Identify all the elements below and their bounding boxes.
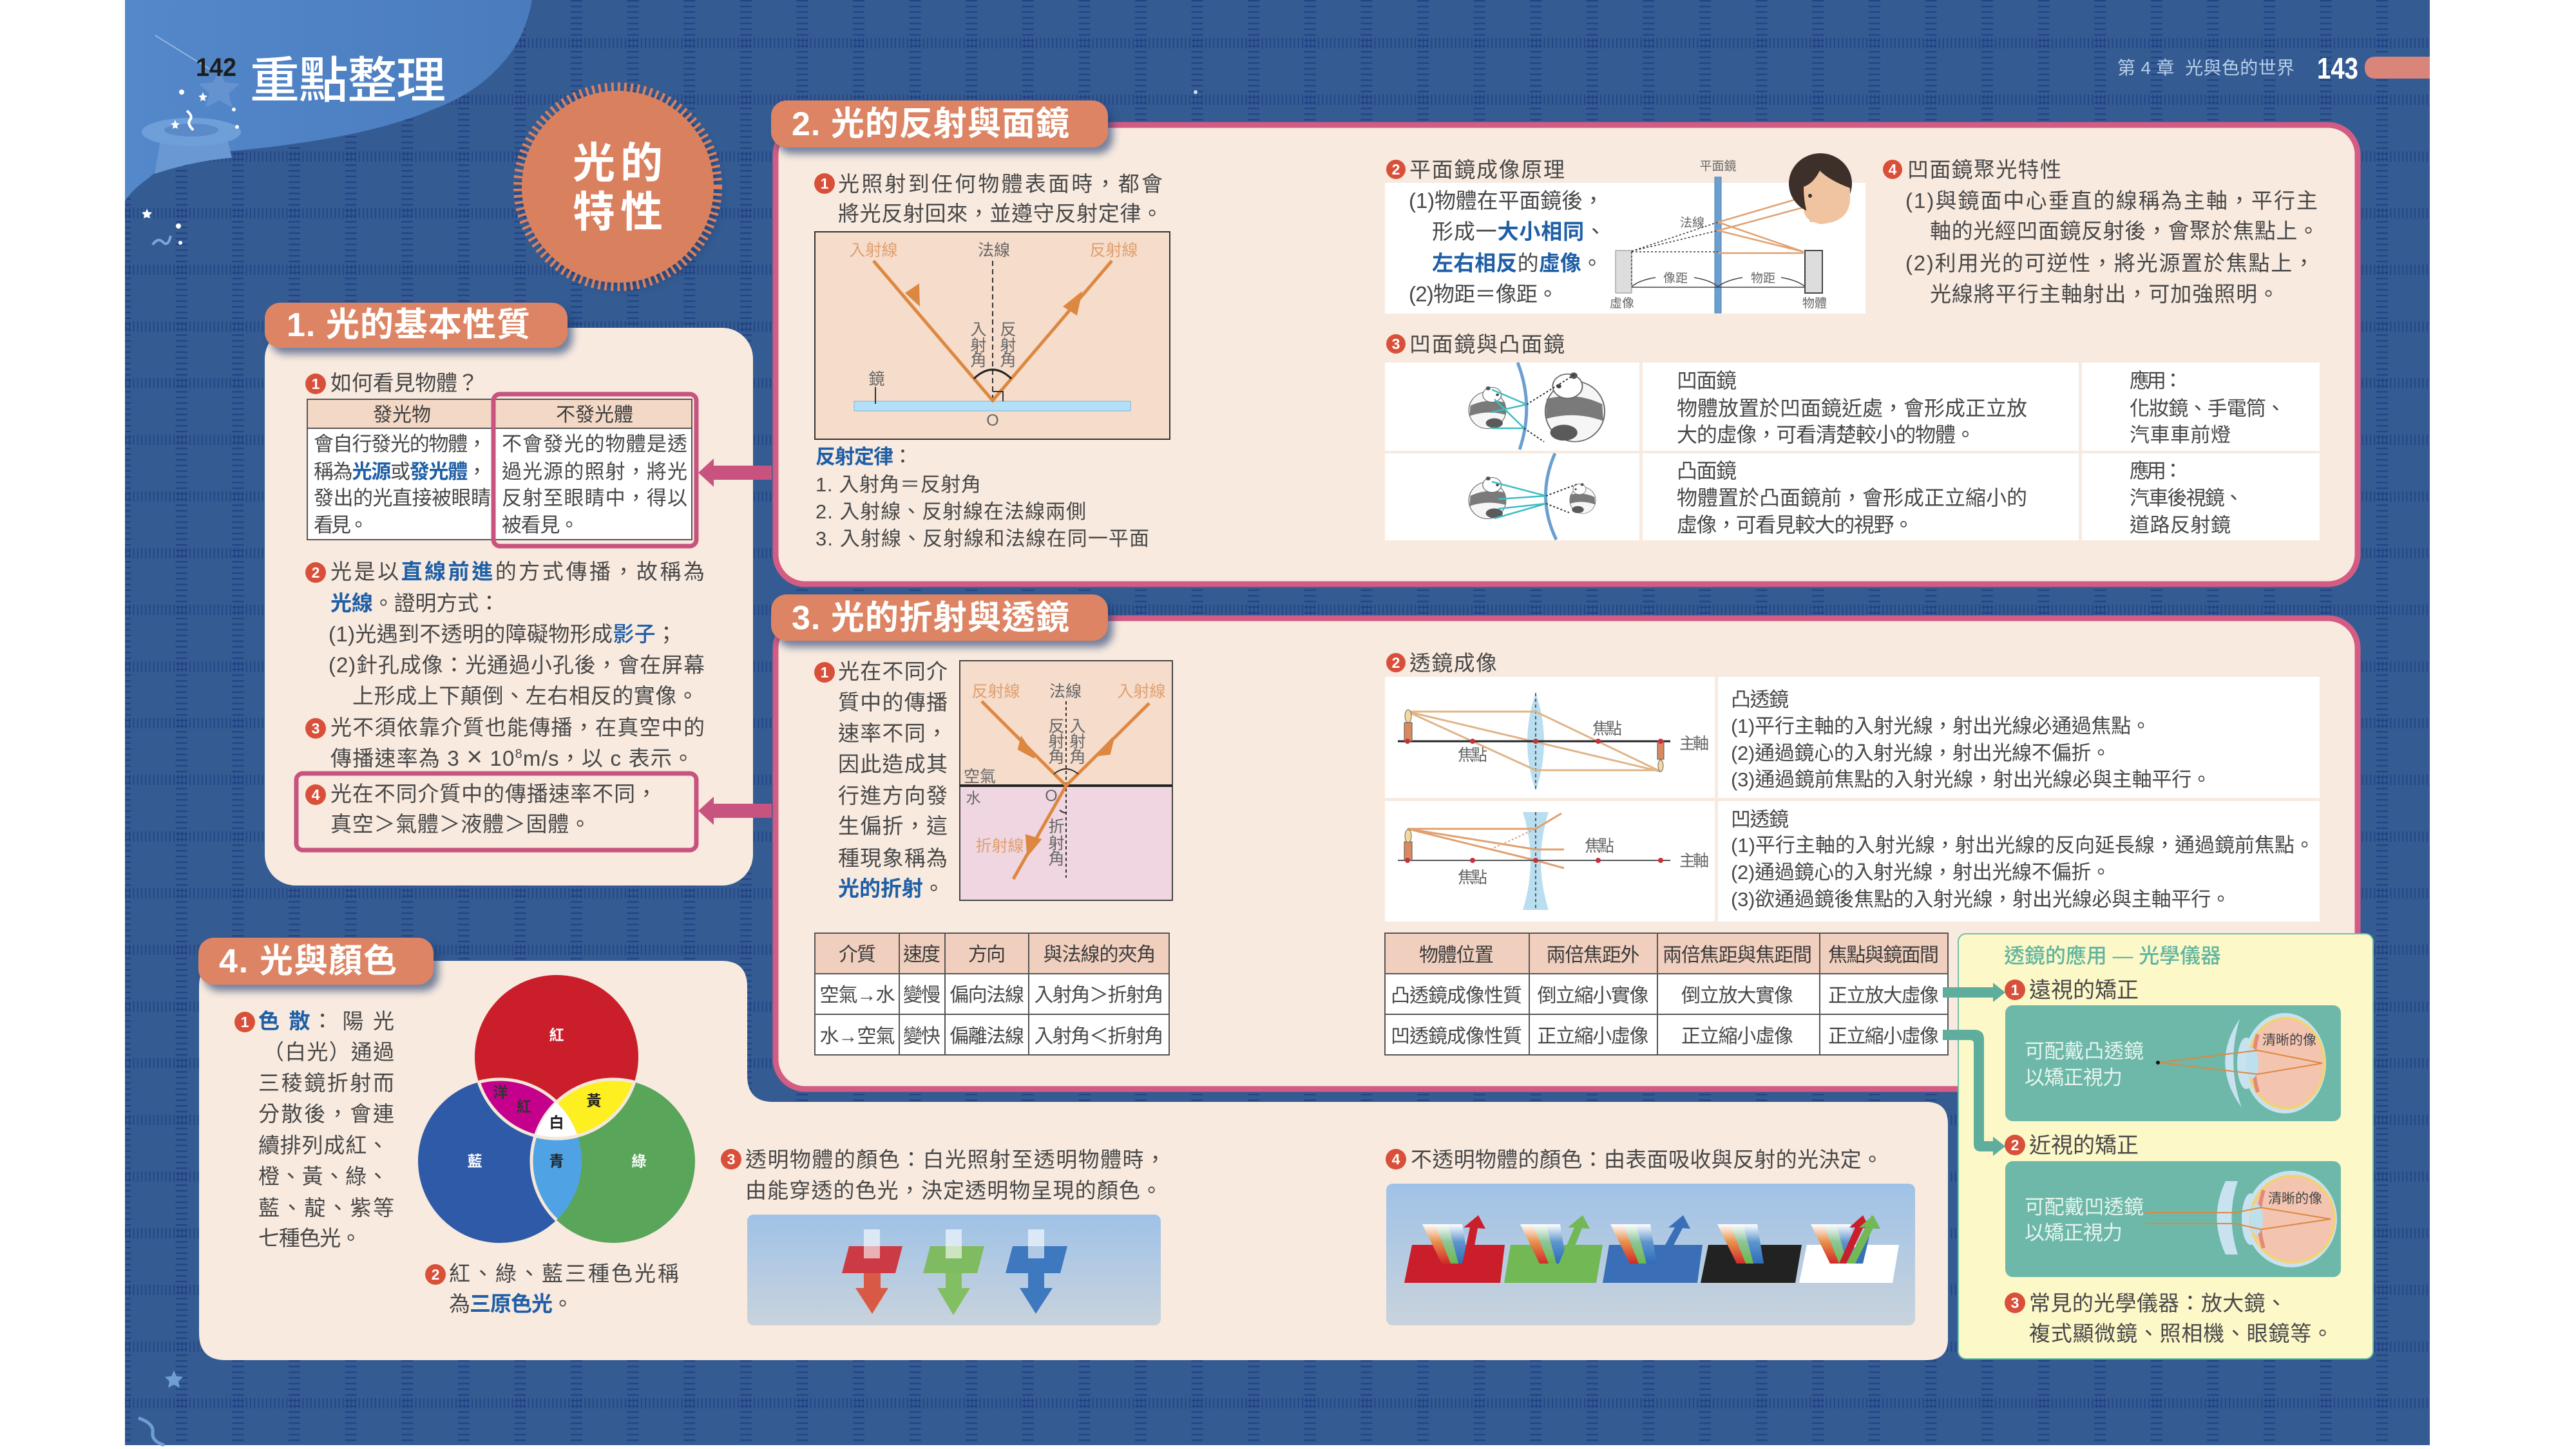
concave lens diagram: 主軸 [1679,852,1709,870]
heading 1 [265,303,573,354]
color mixing venn diagram: 綠 [631,1153,647,1170]
refraction diagram: 反 [1048,717,1065,735]
item 4 opaque object text: 4 [1392,1151,1400,1168]
item 3 instruments text: 常見的光學儀器：放大鏡、 [2029,1291,2287,1315]
page number 142: 142 [196,53,236,82]
item 2 primary colors text: 2 [432,1266,439,1283]
table: media comparison: 偏向法線 [949,985,1024,1006]
refraction diagram: 角 [1069,748,1086,766]
item 2 primary colors text: 紅、綠、藍三種色光稱 [449,1262,679,1285]
nearsightedness diagram: 以矯正視力 [2025,1222,2123,1244]
panel 1: basic properties of light [265,303,753,886]
item 1 refraction text: 1 [821,664,829,681]
table: luminous vs non-luminous: 發光物 [373,404,431,426]
item 3 transparent object text: 由能穿透的色光，決定透明物呈現的顏色。 [745,1179,1162,1202]
item 2 text: 2 [312,564,320,581]
item 3 text [305,715,705,772]
panel: mirror rows background [1385,363,2320,540]
refraction diagram: 折射線 [975,837,1024,855]
text: mirror applications [2130,370,2285,536]
farsightedness heading: 遠視的矯正 [2029,978,2139,1003]
refraction diagram [960,661,1172,900]
law of reflection text: 反射定律： [816,446,913,468]
item 1 refraction text [814,659,948,900]
text: convex and concave lens rules: (1)平行主軸的入射光線，射出光線必通過焦點。 [1731,715,2151,737]
item 1 reflection text [814,172,1163,225]
nearsightedness diagram: 清晰的像 [2268,1191,2322,1206]
heading 3: 3. 光的折射與透鏡 [792,600,1069,637]
text: concave and convex mirrors: 虛像，可看見較大的視野。 [1677,513,1914,536]
heading 2: 2. 光的反射與面鏡 [792,106,1069,143]
item 1 refraction text: 光在不同介 [838,659,948,683]
plane mirror text: (1)物體在平面鏡後， [1409,189,1604,213]
plane mirror diagram: 像距 [1663,271,1688,285]
badge: 光的特性: 光的 [573,139,668,187]
table: lens image properties: 凸透鏡成像性質 [1391,985,1522,1007]
text: convex and concave lens rules: (3)欲通過鏡後焦點的入射光線，射出光線必與主軸平行。 [1731,888,2231,911]
title: 重點整理 [250,53,446,109]
item 1 reflection text: 1 [821,175,829,192]
item 4 text: 4 [312,786,320,803]
item 1 refraction text: 光的折射。 [838,876,944,900]
refraction diagram: 射 [1048,733,1065,751]
item 4 concave mirror text: 光線將平行主軸射出，可加強照明。 [1930,282,2279,306]
text: concave and convex mirrors [1677,369,2027,536]
text: mirror applications: 應用： [2130,370,2183,392]
refraction diagram: 空氣 [964,768,996,786]
reflection diagram: 入射線 [849,242,898,260]
item 2 text: 光線。證明方式： [330,591,500,615]
convex mirror pandas [1469,453,1596,540]
table: lens image properties: 倒立縮小實像 [1537,985,1649,1007]
text: convex and concave lens rules: (1)平行主軸的入射光線，射出光線的反向延長線，通過鏡前焦點。 [1731,834,2314,857]
table: media comparison: 與法線的夾角 [1044,944,1156,965]
item 3 transparent object text: 3 [727,1151,735,1168]
color mixing venn diagram [418,975,695,1243]
table: luminous vs non-luminous: 會自行發光的物體， [314,433,487,455]
item 3 instruments text: 3 [2011,1294,2019,1311]
law of reflection text: 3. 入射線、反射線和法線在同一平面 [816,527,1149,550]
item 1 dispersion text: 三稜鏡折射而 [258,1071,394,1095]
item 1 question: 如何看見物體？ [330,371,479,395]
reflection diagram: 角 [1000,352,1016,370]
plane mirror diagram [1610,153,1852,313]
item 4 text: 光在不同介質中的傳播速率不同， [330,782,657,806]
opaque object diagram [1386,1184,1915,1325]
table: media comparison: 介質 [839,944,876,965]
text: concave and convex mirrors: 物體置於凸面鏡前，會形成正立縮小的 [1677,486,2027,509]
white panel: plane mirror [1385,183,1865,314]
color mixing venn diagram: 青 [549,1153,564,1170]
farsightedness diagram: 清晰的像 [2262,1033,2316,1048]
item 1 refraction text: 生偏折，這 [838,814,948,838]
item 2 text: 上形成上下顛倒、左右相反的實像。 [352,684,698,708]
item 3 mirror type heading: 凹面鏡與凸面鏡 [1409,332,1565,356]
table: lens image properties [1385,933,1948,1055]
table: luminous vs non-luminous: 反射至眼睛中，得以 [502,487,687,509]
table: luminous vs non-luminous: 被看見。 [502,514,579,536]
item 4 concave mirror text: (2)利用光的可逆性，將光源置於焦點上， [1905,251,2314,275]
table: media comparison: 變快 [903,1026,940,1047]
item 2 primary colors text [425,1262,679,1316]
refraction diagram: O [1045,787,1058,805]
text: concave and convex mirrors: 凸面鏡 [1677,459,1737,482]
nearsightedness diagram [2005,1161,2341,1277]
refraction diagram: 射 [1069,733,1086,751]
table: media comparison: 偏離法線 [949,1026,1024,1047]
text: concave and convex mirrors: 凹面鏡 [1677,369,1737,392]
table: luminous vs non-luminous: 發出的光直接被眼睛 [314,487,491,509]
item 3 text: 光不須依靠介質也能傳播，在真空中的 [330,715,705,739]
text: mirror applications: 道路反射鏡 [2130,514,2231,536]
color mixing venn diagram: 紅 [517,1098,531,1115]
item 4 concave mirror text [1883,158,2319,306]
item 4 concave mirror text: (1)與鏡面中心垂直的線稱為主軸，平行主 [1905,189,2318,213]
page number 143: 143 [2317,52,2358,85]
transparent filter diagram [747,1215,1161,1325]
icon: magic hat and stars [142,35,241,245]
farsightedness diagram: 可配戴凸透鏡 [2025,1040,2144,1063]
farsightedness diagram: 以矯正視力 [2025,1066,2123,1089]
farsightedness heading: 1 [2011,981,2019,998]
item 1 dispersion text: 藍、靛、紫等 [258,1196,394,1220]
table: lens image properties: 正立縮小虛像 [1681,1026,1793,1047]
item 1 refraction text: 因此造成其 [838,752,948,776]
refraction diagram: 反射線 [971,683,1020,701]
table: lens image properties: 兩倍焦距與焦距間 [1663,945,1812,966]
reflection diagram: 角 [970,352,987,370]
item 1 dispersion text: 分散後，會連 [258,1102,394,1126]
connector arrow 2 [1943,1030,2005,1156]
law of reflection text: 2. 入射線、反射線在法線兩側 [816,500,1086,523]
table: luminous vs non-luminous: 看見。 [314,514,368,536]
item 3 instruments text: 複式顯微鏡、照相機、眼鏡等。 [2029,1321,2333,1345]
item 4 opaque object text: 不透明物體的顏色：由表面吸收與反射的光決定。 [1411,1148,1883,1171]
item 1 question: 1 [312,375,320,392]
refraction diagram: 法線 [1049,683,1082,701]
panel 3: refraction and lenses [771,594,2358,1089]
item 1 dispersion text: 續排列成紅、 [258,1133,388,1157]
item 4 text: 真空＞氣體＞液體＞固體。 [330,812,591,836]
arrow to item: non-luminous [698,459,772,487]
item 1 refraction text: 速率不同， [838,721,948,745]
reflection diagram: O [986,412,999,430]
page tab [2365,57,2430,79]
item 3 text: 傳播速率為 3 × 10 [330,741,514,772]
reflection diagram: 反射線 [1089,242,1138,260]
reflection diagram: 射 [970,337,987,355]
color mixing venn diagram: 紅 [549,1027,564,1043]
color mixing venn diagram: 洋 [493,1084,508,1101]
panel 4: light and color [198,938,1948,1360]
item 4 concave mirror text: 凹面鏡聚光特性 [1907,158,2061,182]
plane mirror text: 左右相反的虛像。 [1432,251,1603,275]
table: lens image properties: 物體位置 [1419,945,1494,966]
table: media comparison: 水→空氣 [819,1026,895,1047]
plane mirror diagram: 物體 [1802,296,1827,310]
item 3 text: 3 [312,720,320,737]
table: media comparison: 變慢 [903,985,940,1006]
table: luminous vs non-luminous [307,399,692,540]
nearsightedness heading: 2 [2011,1137,2019,1153]
text: mirror applications: 應用： [2130,460,2183,482]
chapter header top right: 第 4 章 光與色的世界 [2117,58,2295,78]
table: lens image properties: 凹透鏡成像性質 [1391,1026,1522,1047]
reflection diagram: 反 [1000,321,1016,339]
text: concave and convex mirrors: 大的虛像，可看清楚較小的物體。 [1677,423,1976,446]
highlight box: speed in media [296,773,696,850]
heading 4: 4. 光與顏色 [219,943,397,980]
table: lens image properties: 正立縮小虛像 [1828,1026,1939,1047]
item 1 refraction text: 質中的傳播 [838,690,948,714]
reflection diagram: 鏡 [868,370,885,388]
text: convex and concave lens rules: (2)通過鏡心的入射光線，射出光線不偏折。 [1731,861,2111,884]
table: media comparison: 空氣→水 [819,985,895,1006]
plane mirror text: (2)物距＝像距。 [1409,282,1558,306]
convex lens diagram: 焦點 [1592,720,1622,738]
item 3 transparent object text: 透明物體的顏色：白光照射至透明物體時， [745,1148,1166,1171]
item 2 plane mirror heading: 2 [1392,161,1400,178]
item 4 concave mirror text: 軸的光經凹面鏡反射後，會聚於焦點上。 [1930,219,2319,243]
text: convex and concave lens rules: (2)通過鏡心的入射光線，射出光線不偏折。 [1731,742,2111,764]
item 2 text: 光是以直線前進的方式傳播，故稱為 [330,560,705,583]
table: media comparison: 入射角＞折射角 [1035,985,1163,1006]
badge: 光的特性: 特性 [573,188,668,236]
connector arrow 1 [1943,983,2005,1002]
item 3 text: m/s，以 c 表示。 [523,746,694,770]
plane mirror diagram: 物距 [1751,271,1775,285]
item 1 dispersion text: （白光）通過 [263,1040,394,1064]
table: media comparison: 方向 [968,944,1006,965]
arrow to item: speed of light [698,797,772,825]
decorative stars bottom left [138,90,1197,1445]
item 3 instruments text [2005,1291,2333,1345]
text: convex and concave lens rules: 凸透鏡 [1731,688,1789,711]
table: luminous vs non-luminous: 稱為光源或發光體， [314,460,487,483]
item 1 dispersion text: 1 [241,1014,249,1030]
text: convex and concave lens rules [1731,688,2314,911]
nearsightedness heading: 近視的矯正 [2029,1133,2139,1158]
concave lens diagram [1398,812,1709,910]
plane mirror diagram: 平面鏡 [1699,159,1737,173]
highlight box: non-luminous [493,394,696,546]
item 1 dispersion text: 色 散： 陽 光 [258,1009,394,1033]
refraction diagram: 折 [1048,818,1065,836]
item 2 primary colors text: 為三原色光。 [449,1292,573,1316]
item 1 dispersion text [234,1009,394,1250]
reflection diagram: 入 [970,321,987,339]
convex lens diagram: 主軸 [1679,735,1709,753]
table: media comparison: 速度 [903,944,940,965]
heading 4 [198,938,439,991]
table: media comparison: 入射角＜折射角 [1035,1026,1163,1047]
callout heading: 透鏡的應用 — 光學儀器 [2004,944,2221,967]
item 1 refraction text: 行進方向發 [838,784,948,808]
text: mirror applications: 汽車後視鏡、 [2130,487,2244,509]
item 1 dispersion text: 橙、黃、綠、 [258,1164,388,1188]
table: lens image properties: 焦點與鏡面間 [1828,945,1939,966]
reflection diagram: 射 [1000,337,1016,355]
refraction diagram: 入射線 [1117,683,1166,701]
convex lens diagram [1398,693,1709,791]
item 2 text [305,560,705,708]
item 2 text: (1)光遇到不透明的障礙物形成影子； [329,622,677,646]
text: concave and convex mirrors: 物體放置於凹面鏡近處，會形成正立放 [1677,397,2027,420]
reflection diagram [815,232,1170,439]
table: luminous vs non-luminous: 不會發光的物體是透 [502,433,687,455]
item 1 dispersion text: 七種色光。 [258,1226,361,1250]
text: mirror applications: 化妝鏡、手電筒、 [2130,397,2285,420]
heading 3 [771,594,1113,647]
nearsightedness diagram: 可配戴凹透鏡 [2025,1196,2144,1218]
refraction diagram: 角 [1048,748,1065,766]
table: luminous vs non-luminous: 不發光體 [556,404,633,426]
item 4 text [305,782,657,836]
concave lens diagram: 焦點 [1458,869,1487,887]
heading 1: 1. 光的基本性質 [287,307,530,344]
item 1 reflection text: 光照射到任何物體表面時，都會 [838,172,1163,196]
item 1 refraction text: 種現象稱為 [838,846,948,870]
item 3 transparent object text [721,1148,1166,1202]
badge: 光的特性 [518,87,720,289]
callout: lens applications [1943,934,2373,1359]
item 2 lens imaging heading: 2 [1392,654,1400,671]
text: convex and concave lens rules: (3)通過鏡前焦點的入射光線，射出光線必與主軸平行。 [1731,768,2211,791]
color mixing venn diagram: 藍 [468,1153,482,1170]
text: mirror applications: 汽車車前燈 [2130,424,2231,446]
table: lens image properties: 正立放大虛像 [1828,985,1939,1007]
panel: lens rows background [1385,677,2320,922]
table: media comparison [815,933,1169,1055]
item 1 reflection text: 將光反射回來，並遵守反射定律。 [838,202,1163,225]
chapter header top right [2117,52,2430,85]
item 2 lens imaging heading: 透鏡成像 [1409,651,1497,675]
plane mirror text: 形成一大小相同、 [1432,220,1606,243]
panel 2: reflection and mirrors [771,100,2358,584]
concave lens diagram: 焦點 [1585,837,1614,855]
refraction diagram: 水 [966,790,980,806]
plane mirror diagram: 虛像 [1610,296,1634,310]
item 4 concave mirror text: 4 [1889,161,1897,178]
table: luminous vs non-luminous: 過光源的照射，將光 [502,460,687,483]
heading 2 [771,100,1113,154]
law of reflection text: 1. 入射角＝反射角 [816,473,981,496]
refraction diagram: 角 [1048,850,1065,868]
top-left title banner [125,0,532,245]
farsightedness diagram [2005,1005,2341,1121]
reflection diagram: 法線 [978,242,1010,260]
concave mirror pandas [1469,363,1605,450]
table: lens image properties: 正立縮小虛像 [1537,1026,1649,1047]
table: lens image properties: 倒立放大實像 [1681,985,1793,1007]
plane mirror text [1409,189,1606,306]
color mixing venn diagram: 黃 [586,1092,602,1109]
item 3 mirror type heading: 3 [1392,336,1400,352]
law of reflection text [816,446,1149,550]
item 2 plane mirror heading: 平面鏡成像原理 [1409,158,1565,182]
refraction diagram: 入 [1069,717,1086,735]
color mixing venn diagram: 白 [549,1114,564,1131]
item 3 text: 8 [515,747,522,761]
convex lens diagram: 焦點 [1458,746,1487,764]
refraction diagram: 射 [1048,835,1065,853]
table: lens image properties: 兩倍焦距外 [1546,945,1640,966]
item 2 text: (2)針孔成像：光通過小孔後，會在屏幕 [329,653,705,677]
plane mirror diagram: 法線 [1680,216,1704,230]
icon: boy looking in mirror [1789,153,1852,224]
text: convex and concave lens rules: 凹透鏡 [1731,808,1789,831]
